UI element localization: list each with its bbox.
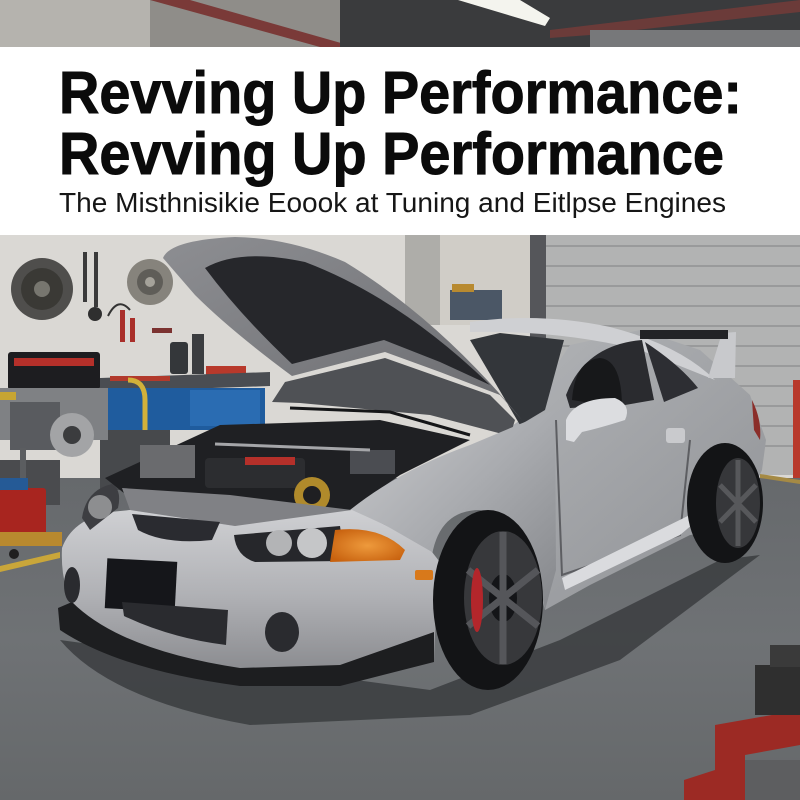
front fender and door panel	[350, 410, 556, 610]
title band	[0, 47, 800, 235]
mirror	[566, 398, 627, 442]
radiator support	[122, 488, 352, 526]
subtitle: The Misthnisikie Eoook at Tuning and Eitlpse Engines	[59, 187, 726, 218]
red toolbox cart	[0, 478, 62, 559]
car shadow	[60, 555, 760, 725]
car rear body and door	[440, 330, 766, 610]
title line 2: Revving Up Performance	[59, 121, 724, 187]
fog light	[265, 612, 299, 652]
foreground red tool	[684, 645, 800, 800]
wiper	[290, 408, 470, 435]
side windows	[566, 340, 654, 408]
door seam	[556, 420, 690, 575]
car	[58, 237, 766, 690]
spoiler	[708, 332, 736, 378]
rear light	[752, 400, 760, 440]
front wheel	[433, 510, 543, 690]
seat	[572, 358, 622, 408]
workbench	[100, 372, 270, 490]
licence plate	[105, 558, 177, 612]
floor	[0, 478, 800, 800]
icon: wheel on wall right	[127, 259, 173, 305]
right headlight	[234, 526, 345, 562]
garage ceiling background	[0, 0, 800, 47]
rear wheel	[687, 443, 763, 563]
engine on stand	[0, 352, 108, 488]
wall tools	[11, 252, 246, 378]
open hood	[163, 237, 522, 420]
engine bay	[105, 420, 470, 525]
engine parts	[140, 444, 395, 513]
left headlight	[82, 484, 119, 530]
windshield under hood	[272, 358, 515, 436]
floor markings	[0, 460, 800, 572]
shelf	[450, 290, 502, 320]
side skirt	[562, 490, 716, 590]
grille	[132, 514, 220, 541]
lower vent	[122, 602, 228, 645]
amber indicator	[330, 529, 405, 562]
icon: wheel on wall left	[11, 258, 73, 320]
front bumper	[62, 510, 450, 680]
right red post	[793, 380, 800, 480]
car roof	[470, 318, 715, 380]
workshop background	[0, 235, 800, 485]
title line 1: Revving Up Performance:	[59, 60, 742, 126]
lower lip	[58, 602, 434, 686]
door handle	[666, 428, 685, 443]
